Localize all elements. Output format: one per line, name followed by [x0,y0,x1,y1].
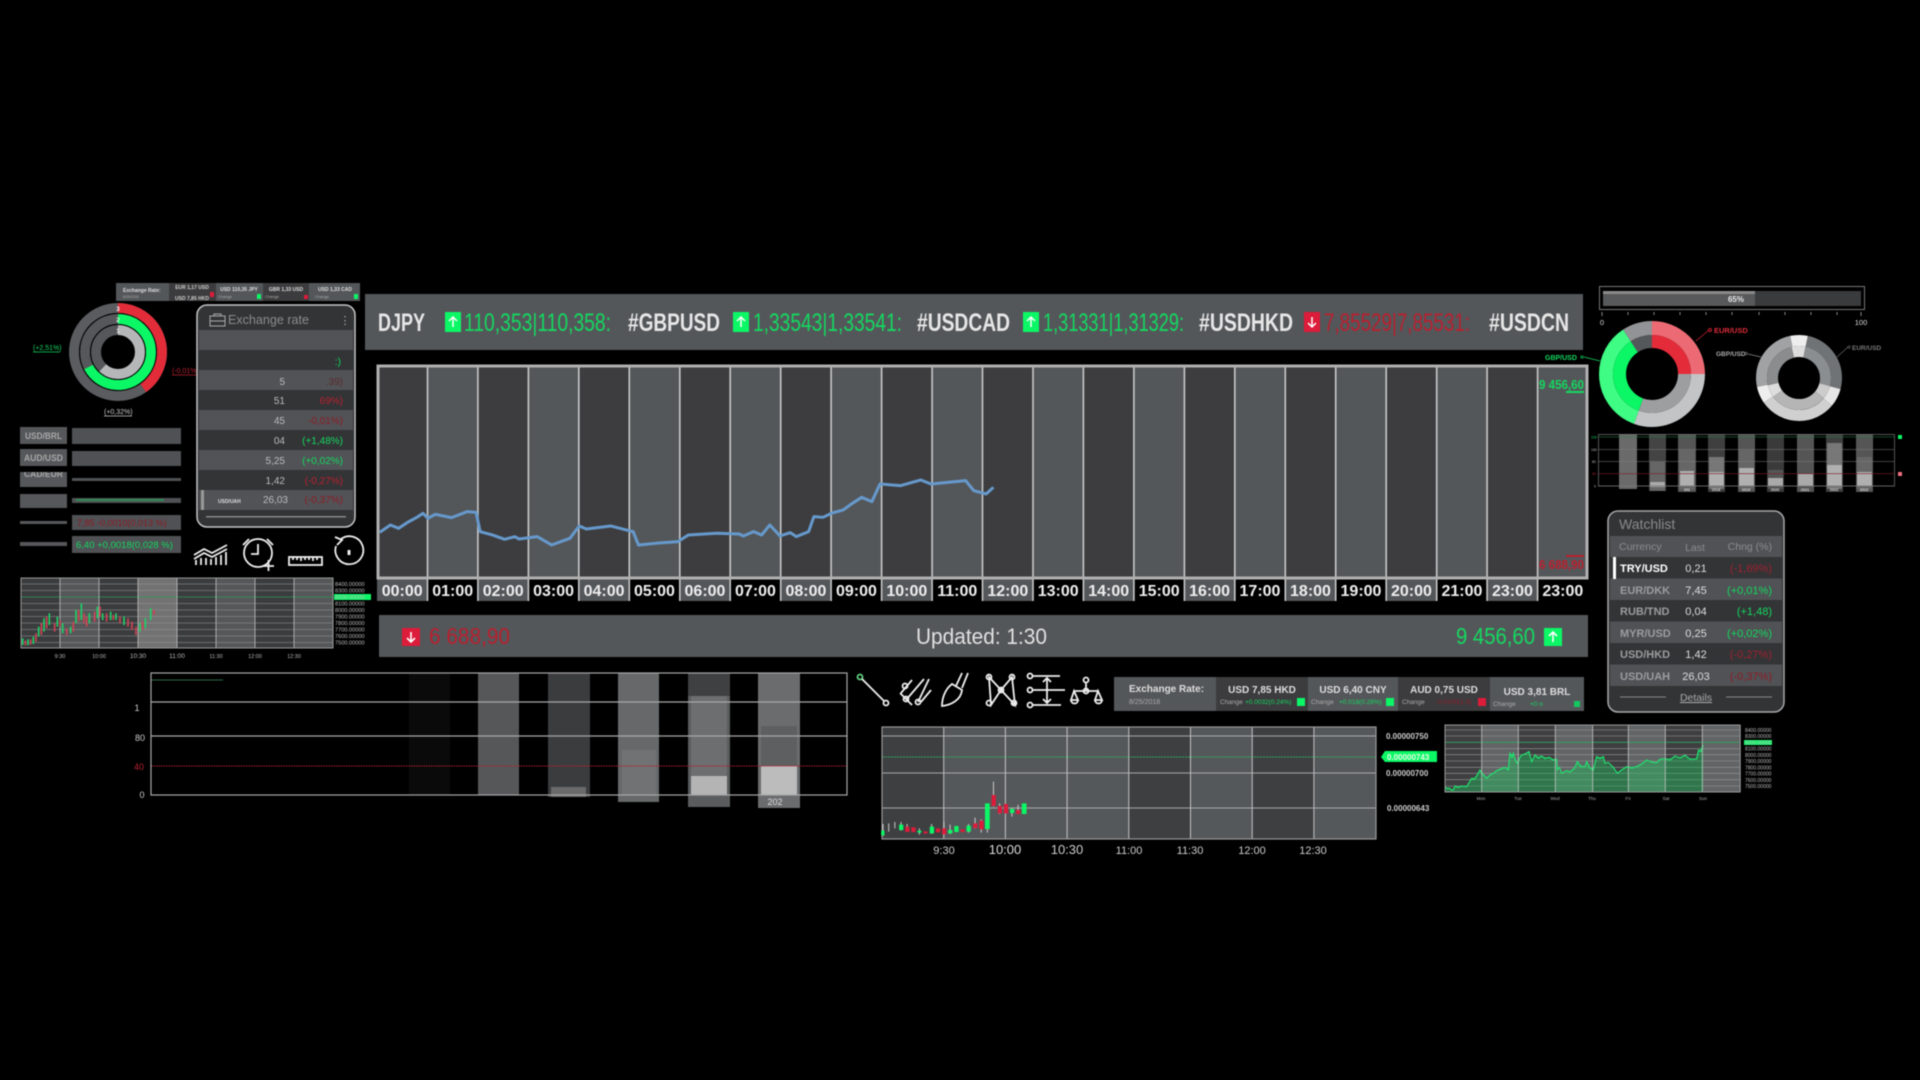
price axis: 8400.00000 [1745,728,1772,734]
day labels [1477,796,1707,801]
bar axis labels: 80 [135,733,145,743]
exchange rate panel: 1,42 [266,476,285,487]
exchange rate bar: 8/25/2018 [1129,699,1160,706]
time axis row: 00:00 [382,583,423,600]
icon: alarm clock [243,539,274,571]
exchange rate bar: Change [1493,701,1516,708]
price axis [1744,728,1772,790]
row: USD/HKD: USD/HKD [1620,649,1670,661]
price axis: 7700.00000 [1745,772,1772,778]
time axis row: 15:00 [1139,583,1180,600]
currency list: 7,85 -0,0010(0,013 %) [77,518,167,528]
small exchange rate strip: USD 110,35 JPY [220,287,259,293]
row: MYR/USD: 0,25 [1685,628,1707,640]
axis labels [1591,436,1597,488]
exchange rate panel [197,305,355,527]
ticker bar: 7,85529|7,85531: [1324,309,1470,337]
ring gauge: 2 [116,318,120,324]
time axis row: 09:00 [836,583,877,600]
stacked bar chart bottom [134,673,847,808]
time axis row: 19:00 [1341,583,1382,600]
row: USD/UAH: (-0,37%) [1730,671,1772,683]
exchange rate panel: 04 [274,436,285,447]
exchange rate panel: 5,25 [266,456,285,467]
progress gauge: 65% [1728,295,1744,304]
day labels: Wed [1550,796,1560,801]
row: RUB/TND: RUB/TND [1620,606,1670,618]
price axis: 0.00000750 [1386,732,1429,741]
bar year labels: 2023 [1860,488,1868,492]
watchlist panel: Currency [1619,541,1662,553]
exchange rate panel: (-0,27%) [305,476,343,487]
exchange rate panel: ⋮ [340,315,350,327]
price axis: 0.00000743 [1387,753,1430,762]
time axis row: 04:00 [584,583,625,600]
middle candlestick chart [881,727,1437,857]
price line [380,480,993,545]
label: EUR/USD: EUR/USD [1714,326,1748,335]
watchlist panel [1608,511,1784,712]
price axis: 8100.00000 [1745,747,1772,753]
exchange rate bar: Change [1402,699,1425,706]
small exchange rate strip [116,283,360,302]
currency list [18,427,181,553]
exchange rate panel: 45 [274,416,285,427]
row: USD/UAH: USD/UAH [1620,671,1670,683]
bar year labels: 2020 [1771,488,1779,492]
price axis: 7600.00000 [1745,778,1772,784]
watchlist panel: Last [1685,542,1705,554]
time labels: 11:30 [209,654,223,660]
day labels: Mon [1477,796,1486,801]
exchange rate bar: +0.018(0.28%) [1339,699,1382,706]
icon: ruler [289,557,322,565]
label: GBP/USD [1545,355,1600,362]
time labels: 11:30 [1177,845,1203,857]
bar year labels [1684,488,1868,492]
time labels: 10:30 [130,653,147,660]
small exchange rate strip: GBR 1,33 USD [269,287,303,293]
exchange rate panel: (+1,48%) [302,436,343,447]
stacked bar chart bottom: 202 [767,797,783,807]
ticker bar [365,294,1583,350]
progress gauge: 0 [1600,318,1604,327]
exchange rate panel: :) [335,357,341,368]
bar year labels: 201 [1684,488,1690,492]
row: EUR/DKK: EUR/DKK [1620,585,1670,597]
row: USD/HKD [1620,649,1772,661]
row: EUR/DKK: 7,45 [1685,585,1707,597]
day labels: Sun [1699,796,1707,801]
time axis row: 11:00 [937,583,977,600]
donut chart: currency pairs [1545,326,1748,420]
exchange rate panel: (-0,37%) [305,495,343,506]
exchange rate bar: USD 3,81 BRL [1504,687,1570,698]
exchange rate panel: 5 [279,377,285,388]
price axis [1381,732,1437,813]
ring gauge: 3 [116,307,120,313]
price axis: 8200.00000 [335,595,365,601]
details link: Details [1680,692,1712,704]
candles [23,603,154,645]
time axis row: 08:00 [785,583,826,600]
high and low markers: 9 456,60 [1539,378,1584,392]
icon: fibonacci levels [1028,674,1065,708]
price axis: 7900.00000 [335,614,365,620]
day labels: Sat [1663,796,1670,801]
time axis row: 16:00 [1189,583,1230,600]
row: RUB/TND [1620,606,1772,618]
row: EUR/DKK: (+0,01%) [1727,585,1772,597]
exchange rate panel: .39) [326,377,343,388]
exchange rate panel: -0,01%) [308,416,343,427]
row: MYR/USD: (+0,02%) [1727,628,1772,640]
progress gauge [1600,286,1867,327]
time axis row: 14:00 [1088,583,1129,600]
main line chart [377,365,1588,601]
label: EUR/USD: EUR/USD [1852,345,1882,352]
time labels: 10:00 [989,842,1021,857]
axis labels: 0 [1594,484,1596,488]
ring labels: (+2,51%) [33,345,62,352]
exchange rate bar: USD 6,40 CNY [1319,685,1387,696]
price axis: 8100.00000 [335,602,365,608]
icon: network nodes [986,674,1016,706]
row: EUR/DKK [1620,585,1772,597]
high and low markers [1539,378,1584,572]
exchange rate panel: USD/UAH [218,499,241,505]
row: TRY/USD [1613,557,1772,579]
label: EUR/USD [1837,345,1882,357]
time labels: 9:30 [933,845,955,857]
high and low markers: 6 688,90 [1539,558,1584,572]
day labels: Tue [1514,796,1522,801]
green area chart [1445,725,1772,801]
exchange rate bar: Change [1311,699,1334,706]
price axis: 0.00000643 [1387,804,1430,813]
icon: market chart [194,545,227,565]
time axis row: 02:00 [483,583,524,600]
currency list: USD/BRL [25,431,62,441]
progress gauge: 100 [1855,318,1867,327]
small exchange rate strip: 8/25/2018 [123,295,139,299]
time labels: 11:00 [169,653,185,660]
price axis: 8200.00000 [1745,740,1772,746]
bar year labels: 2019 [1742,488,1750,492]
bar axis labels: 1 [134,703,140,713]
ticker bar: 1,33543|1,33541: [753,309,902,337]
updated bar: Updated: 1:30 [916,624,1047,649]
updated bar: 6 688,90 [429,623,510,649]
bar axis labels [134,703,145,800]
price axis: 7500.00000 [1745,784,1772,790]
exchange rate panel: Exchange rate [228,312,309,327]
ticker bar: 1,31331|1,31329: [1043,309,1184,337]
exchange rate panel: (+0,02%) [302,456,343,467]
time labels: 11:00 [1116,845,1142,857]
time labels: 10:00 [92,654,106,660]
small exchange rate strip: Exchange Rate: [123,288,161,294]
icon: brush [942,673,968,706]
ticker bar: #USDCAD [917,309,1010,337]
price axis: 8300.00000 [1745,734,1772,740]
time axis row: 21:00 [1441,583,1482,600]
time axis row: 05:00 [634,583,675,600]
ticker bar: DJPY [378,309,425,337]
price axis: 7700.00000 [335,628,365,634]
donut chart: gray [1716,340,1882,416]
exchange rate bar: +0 n [1530,701,1543,708]
exchange rate panel: 26,03 [263,495,288,506]
ticker bar: 110,353|110,358: [464,309,611,337]
time axis row: 13:00 [1038,583,1079,600]
time labels: 12:00 [1238,845,1266,857]
watchlist panel: Watchlist [1619,516,1675,532]
exchange rate bar: +0.0032(0.24%) [1245,699,1291,706]
toolbar icons [858,673,1102,708]
exchange rate panel: 51 [274,396,285,407]
ring gauge: 1 [116,329,120,335]
exchange rate bar: USD 7,85 HKD [1228,685,1296,696]
exchange rate bar: Change [1220,699,1243,706]
bar axis labels: 0 [139,790,145,800]
icon: pitchfork [900,679,931,705]
row: TRY/USD: 0,21 [1685,563,1707,575]
small exchange rate strip: Change [218,294,233,299]
currency list: AUD/USD [24,453,63,463]
day labels: Thu [1588,796,1596,801]
price axis: 8300.00000 [335,588,365,594]
price axis: 7800.00000 [335,621,365,627]
ring labels [33,345,199,416]
time axis row: 06:00 [685,583,726,600]
axis labels: 80 [1592,460,1596,464]
exchange rate bar: Exchange Rate: [1129,684,1204,695]
price axis: 7600.00000 [335,634,365,640]
label: EUR/USD [1696,326,1748,341]
row: RUB/TND: 0,04 [1685,606,1707,618]
price axis: 7900.00000 [1745,759,1772,765]
currency list: 6,40 +0,0018(0,028 %) [76,540,173,551]
time axis row: 12:00 [987,583,1028,600]
axis labels: 100 [1591,436,1597,440]
small exchange rate strip: USD 7,85 HKD [175,296,209,302]
time labels: 9:30 [55,654,65,660]
row: MYR/USD: MYR/USD [1620,628,1671,640]
exchange rate bar: AUD 0,75 USD [1410,685,1478,696]
time labels [55,653,301,660]
ticker bar: #GBPUSD [628,309,720,337]
time axis row: 20:00 [1391,583,1432,600]
ring labels: (-0,01%) [172,368,199,375]
time labels: 12:30 [1299,845,1327,857]
label: GBP/USD: GBP/USD [1545,355,1577,362]
updated bar: 9 456,60 [1456,623,1535,649]
axis labels: 40 [1592,472,1596,476]
label: GBP/USD [1716,351,1761,358]
bar year labels: 2021 [1801,488,1809,492]
price axis: 8000.00000 [335,608,365,614]
exchange rate panel: 69%) [320,396,343,407]
time axis row: 07:00 [735,583,776,600]
bar year labels: 2018 [1712,488,1720,492]
icon: undo [335,536,363,564]
label: GBP/USD: GBP/USD [1716,351,1746,358]
time labels: 12:00 [248,654,262,660]
price axis: 0.00000700 [1386,769,1429,778]
price axis: 7800.00000 [1745,766,1772,772]
time labels: 12:30 [287,654,301,660]
icon: balance scale [1071,678,1102,704]
small candlestick chart [21,578,371,660]
small exchange rate strip: USD 1,33 CAD [318,287,352,293]
small exchange rate strip: Change [265,294,280,299]
updated bar [379,615,1588,657]
row: USD/UAH: 26,03 [1682,671,1710,683]
ring gauge [33,307,199,416]
icon: briefcase [210,314,225,326]
legend squares [1898,435,1902,476]
bar axis labels: 40 [134,762,144,772]
watchlist panel: Chng (%) [1728,541,1772,553]
time axis row: 17:00 [1240,583,1281,600]
time labels [933,842,1327,857]
ring labels: (+0,32%) [104,409,133,416]
bar year labels: 2022 [1830,488,1838,492]
price axis: 7500.00000 [335,640,365,646]
price axis [334,582,371,646]
time axis row: 23:00 [1542,583,1583,600]
day labels: Fri [1625,796,1631,801]
currency list: CAD/EUR [24,469,63,479]
ticker bar: #USDCN [1489,309,1569,337]
row: RUB/TND: (+1,48) [1737,606,1772,618]
icon: line tool [858,674,888,706]
row: USD/HKD: 1,42 [1685,649,1707,661]
row: MYR/USD [1620,628,1772,640]
small stacked bar chart [1591,434,1902,492]
time axis row: 23:00 [1492,583,1533,600]
axis labels: 160 [1591,448,1597,452]
exchange rate bar: -0.0100(1.3) [1436,699,1471,706]
time labels: 10:30 [1051,842,1083,857]
small exchange rate strip: EUR 1,17 USD [175,285,209,291]
row: USD/HKD: (-0,27%) [1730,649,1772,661]
small exchange rate strip: Change [315,294,330,299]
time axis row: 10:00 [886,583,927,600]
price axis: 8000.00000 [1745,753,1772,759]
price axis: 8400.00000 [335,582,365,588]
row: TRY/USD: TRY/USD [1620,563,1668,575]
row: USD/UAH [1620,671,1772,683]
candles [881,782,1027,836]
ticker bar: #USDHKD [1199,309,1293,337]
exchange rate bar [1114,677,1584,711]
row: TRY/USD: (-1,69%) [1730,563,1772,575]
time axis row [377,365,1583,601]
time axis row: 18:00 [1290,583,1331,600]
time axis row: 03:00 [533,583,574,600]
time axis row: 01:00 [432,583,473,600]
